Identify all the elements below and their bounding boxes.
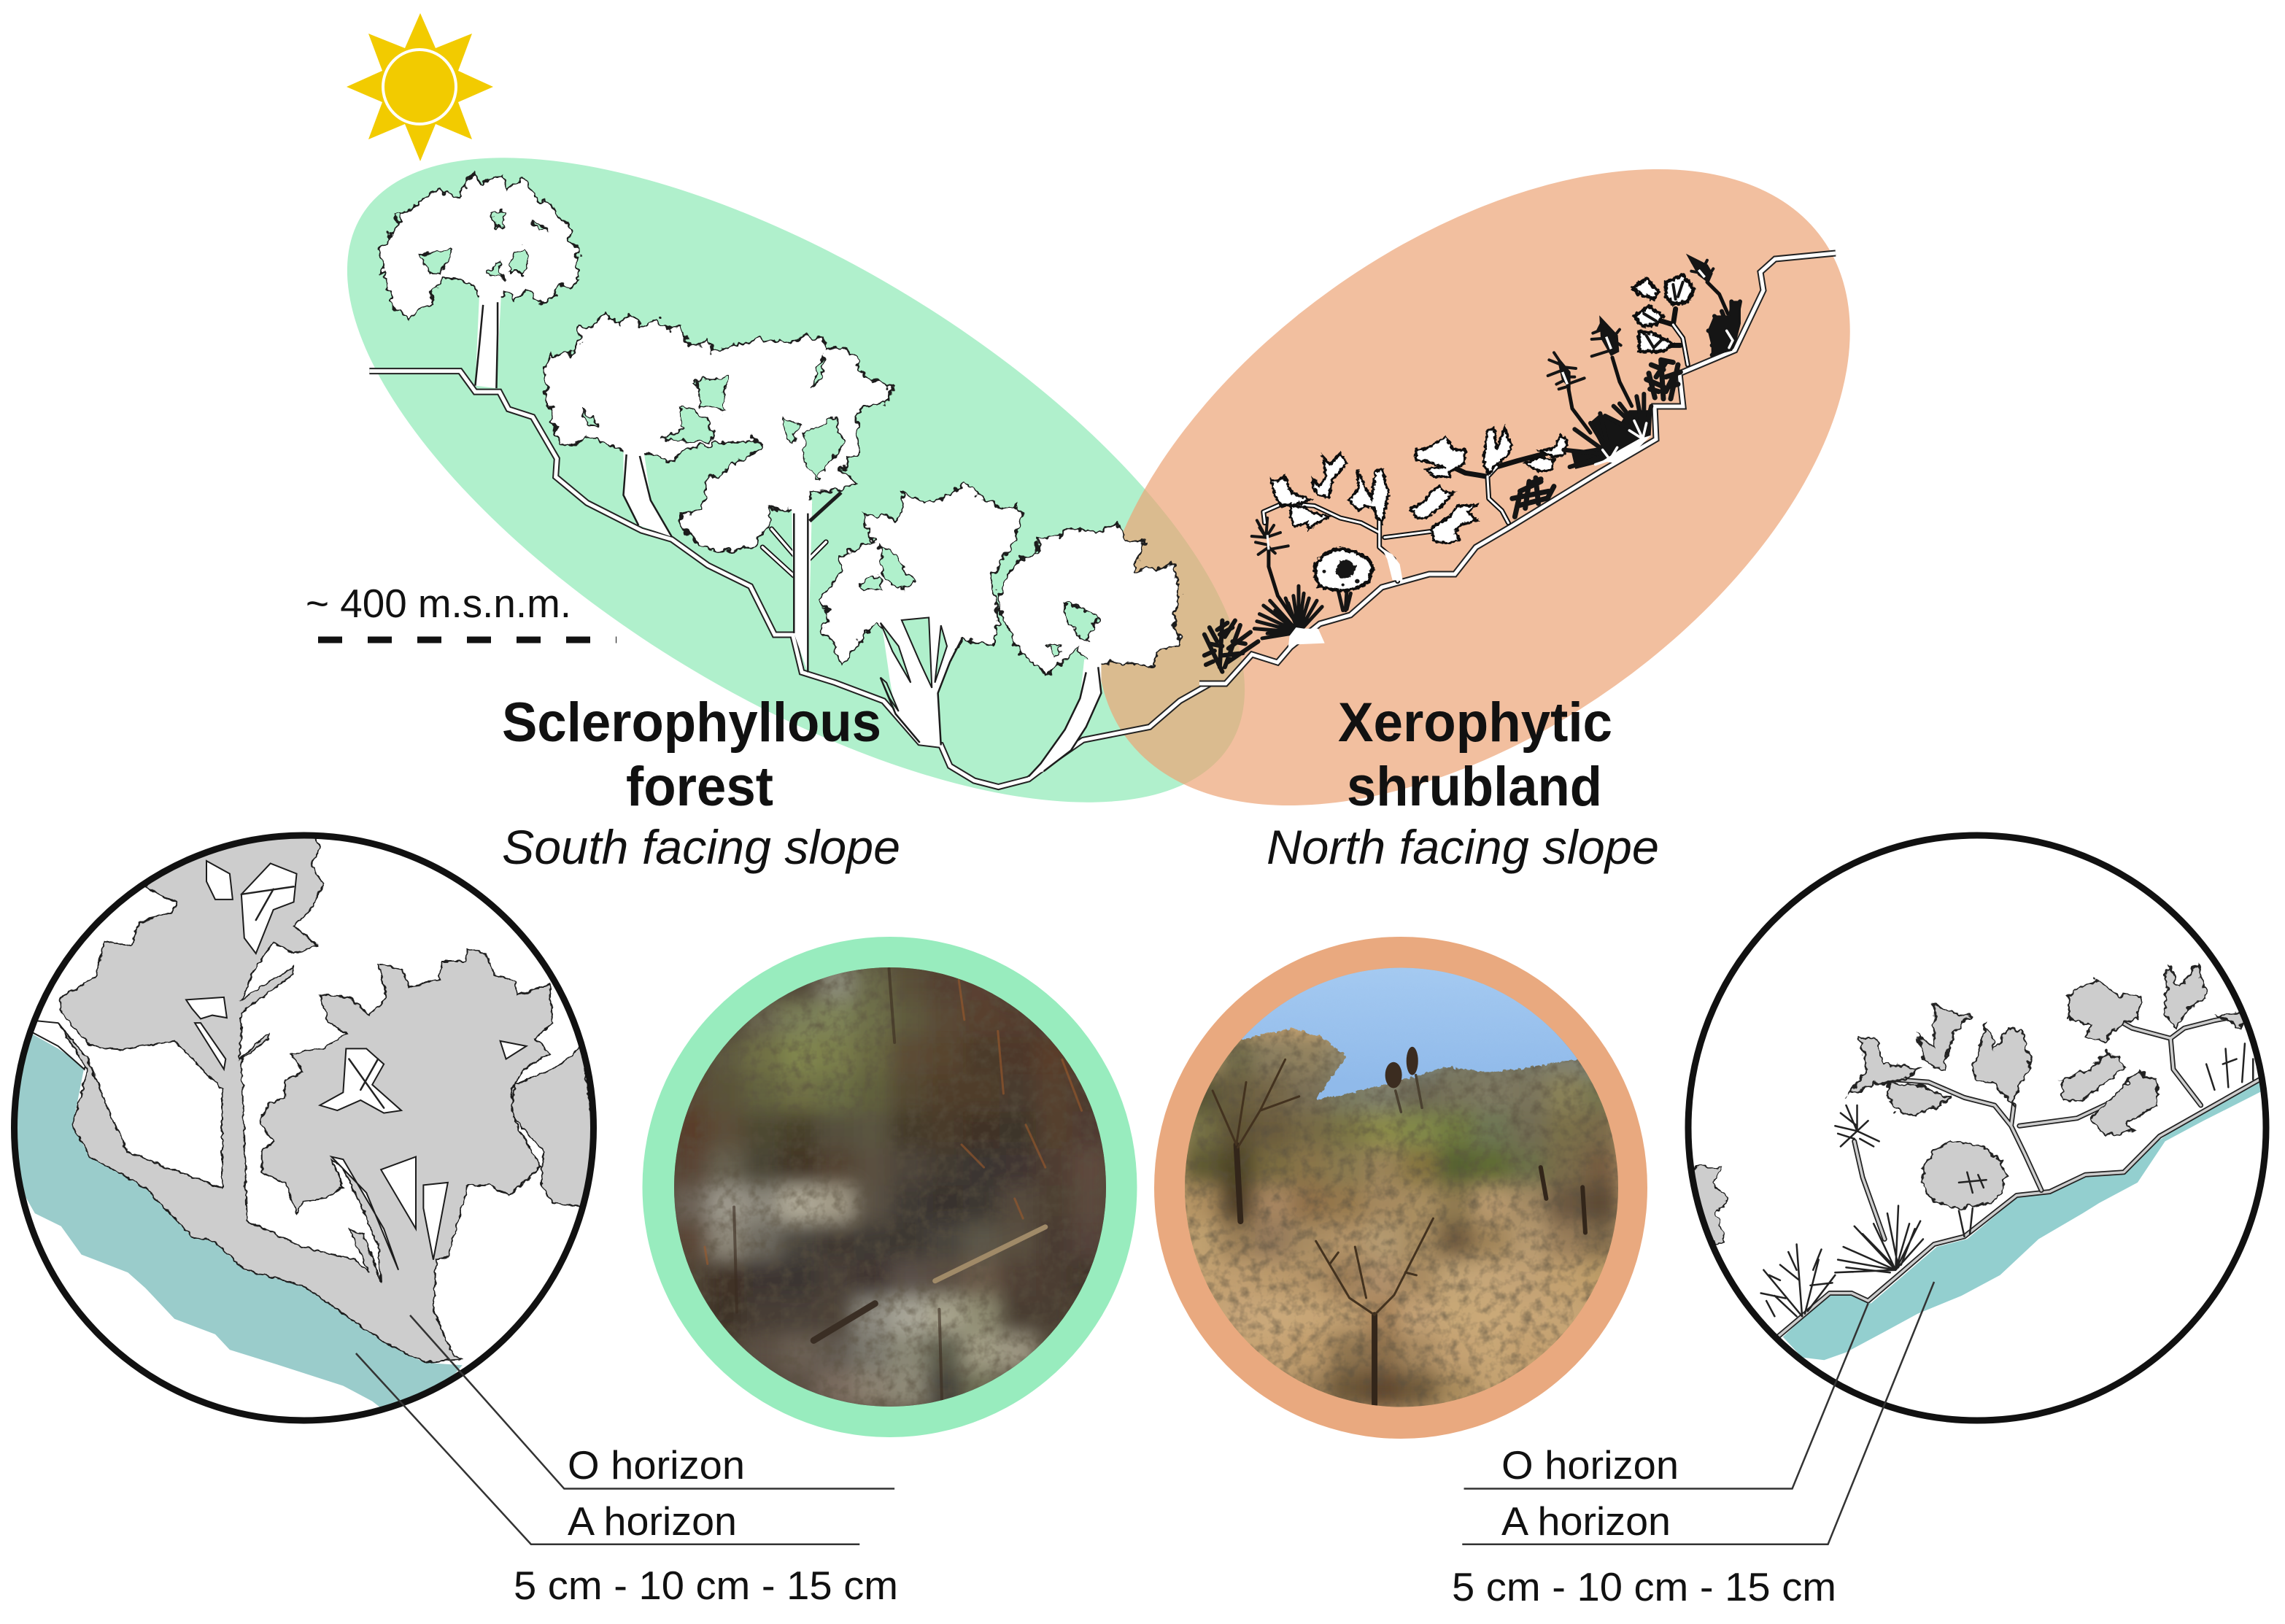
title: Sclerophyllous forest: forest <box>626 756 773 818</box>
yucca flower stalks <box>1385 1047 1418 1089</box>
leaves <box>1849 964 2242 1136</box>
panel: shrubland photo <box>1154 937 1647 1439</box>
branches of shrub A <box>1264 503 1453 581</box>
title: Xerophytic shrubland: Xerophytic <box>1338 692 1612 754</box>
leader lines: shrubland horizons <box>1462 1282 1934 1544</box>
illustration: north slope ground line <box>1199 253 1836 684</box>
shrub C <box>1633 275 1694 365</box>
labels: forest horizons: O horizon <box>568 1442 745 1488</box>
tuft highlights <box>1563 270 1705 384</box>
crown gaps <box>186 861 526 1270</box>
labels: shrubland horizons: O horizon <box>1501 1442 1679 1488</box>
stalks <box>1569 282 1728 433</box>
agave rosettes <box>1563 301 1740 468</box>
tree 4 crown <box>820 482 1019 665</box>
sky <box>1242 967 1577 1100</box>
illustration: black shrub on lower slope <box>1205 621 1258 672</box>
subtitle: north facing slope: North facing slope <box>1267 820 1659 874</box>
labels: shrubland horizons: A horizon <box>1501 1499 1671 1544</box>
icon: sun <box>347 13 493 161</box>
tree 3 trunk and branches <box>762 492 841 672</box>
panel: xerophytic shrubland ellipse <box>983 40 1964 935</box>
trees 2 and 3 crowns <box>545 313 892 552</box>
flower tufts <box>1548 255 1713 389</box>
title: Sclerophyllous forest: Sclerophyllous <box>502 692 881 754</box>
text: altitude label: ~ 400 m.s.n.m. <box>306 581 571 626</box>
labels: forest horizons: 5 cm - 10 cm - 15 cm <box>514 1563 898 1608</box>
panel: forest soil close-up circle <box>12 832 605 1420</box>
panel: sclerophyllous forest ellipse <box>250 31 1342 929</box>
panel: forest photo <box>642 937 1137 1437</box>
A horizon soil band <box>1783 1080 2270 1360</box>
O horizon and trees <box>29 832 605 1363</box>
leaves of shrub B <box>1416 428 1567 476</box>
illustration: plants on upper slope <box>1548 255 1740 468</box>
black shrub <box>1512 478 1554 517</box>
tree 5 crown <box>998 524 1180 675</box>
black shrub <box>1647 360 1680 399</box>
tree 1 trunk <box>475 292 501 388</box>
title: Xerophytic shrubland: shrubland <box>1347 756 1602 818</box>
illustration: south slope ground line <box>369 371 1210 787</box>
subtitle: south facing slope: South facing slope <box>502 820 900 874</box>
title: Xerophytic shrubland <box>1338 692 1612 818</box>
labels: forest horizons <box>514 1442 898 1608</box>
agave with flower stalk <box>1252 518 1325 648</box>
tree 5 trunk <box>1029 660 1101 776</box>
round shrub <box>1315 549 1373 611</box>
tree 4 trunk <box>881 615 962 745</box>
O horizon ground line <box>1774 1077 2264 1339</box>
neighbouring tree edge <box>1694 1164 1728 1245</box>
leader lines: forest horizons <box>356 1315 894 1544</box>
labels: forest horizons: A horizon <box>568 1499 737 1544</box>
labels: shrubland horizons: 5 cm - 10 cm - 15 cm <box>1452 1564 1836 1609</box>
tree 2 trunk <box>623 443 672 537</box>
illustration: forest tree trunks <box>475 292 1101 776</box>
branches <box>1855 1013 2242 1239</box>
A horizon soil band <box>12 1032 463 1419</box>
dashed altitude line <box>318 636 616 643</box>
round shrub <box>1923 1141 2007 1237</box>
leaves of shrub A <box>1271 454 1477 544</box>
illustration: forest tree crowns <box>379 174 1180 675</box>
panel: shrubland soil close-up circle <box>1681 835 2270 1420</box>
illustration: shrubs on mid slope <box>1252 428 1567 648</box>
labels: shrubland horizons <box>1452 1442 1836 1609</box>
black shrub <box>1761 1043 2253 1316</box>
agave <box>1835 1105 1923 1272</box>
tree 1 crown <box>379 174 581 317</box>
branches of shrub B <box>1442 450 1559 523</box>
title: Sclerophyllous forest <box>502 692 881 818</box>
